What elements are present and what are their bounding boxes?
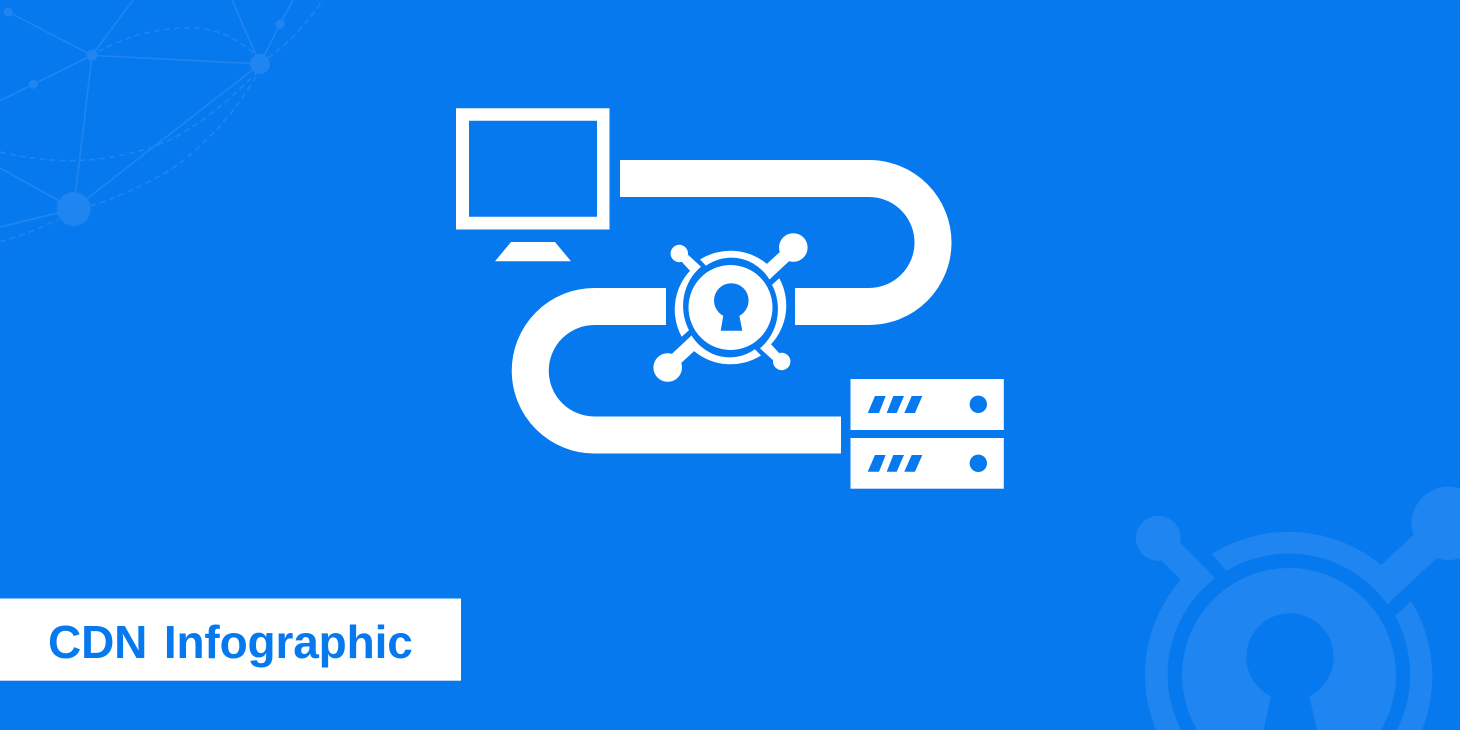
watermark logo, bottom right — [1136, 487, 1460, 730]
title text: CDN Infographic — [48, 616, 413, 668]
decorative network graphic, top left — [0, 0, 323, 242]
icon: computer monitor — [456, 108, 610, 261]
icon: server stack — [850, 379, 1004, 489]
connection pipe from logo to server — [530, 306, 841, 435]
connection pipe from monitor to logo — [620, 178, 933, 306]
icon: central keyhole logo — [653, 233, 808, 382]
title banner — [0, 598, 461, 681]
